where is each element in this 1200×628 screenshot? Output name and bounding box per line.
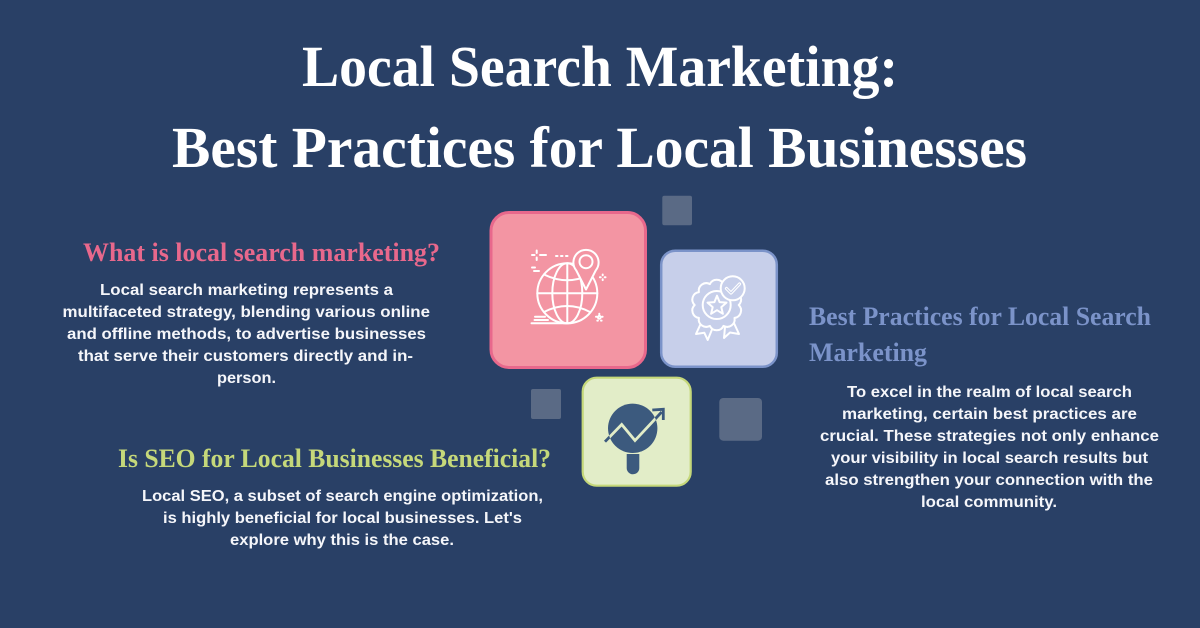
panel: best practices	[809, 302, 1159, 511]
decorative square: top	[662, 196, 692, 225]
panel: is SEO beneficial	[118, 444, 551, 549]
heading: what is local search marketing: What is local search marketing?	[83, 238, 440, 267]
icon: globe with location pin	[532, 250, 606, 323]
text block: local search definition: multifaceted strategy, blending various online	[62, 304, 430, 321]
text block: best practices explanation	[820, 384, 1159, 511]
text block: local search definition: and offline methods, to advertise businesses	[67, 326, 426, 343]
text block: local SEO explanation: is highly beneficial for local businesses. Let's	[163, 510, 522, 527]
text block: local search definition	[62, 282, 430, 387]
text block: best practices explanation: also strengthen your connection with the	[825, 472, 1153, 489]
text block: local search definition: person.	[217, 370, 276, 387]
text block: best practices explanation: crucial. These strategies not only enhance	[820, 428, 1159, 445]
text block: local search definition: Local search marketing represents a	[100, 282, 393, 299]
card: green analytics	[583, 378, 691, 486]
heading: best practices: Best Practices for Local Search	[809, 302, 1152, 331]
text block: best practices explanation: marketing, certain best practices are	[842, 406, 1137, 423]
heading: best practices	[809, 302, 1152, 367]
heading: is SEO beneficial: Is SEO for Local Businesses Beneficial?	[118, 444, 551, 473]
title	[172, 34, 1027, 180]
title: Local Search Marketing:	[302, 34, 898, 99]
card: blue medal	[661, 251, 777, 367]
text block: local search definition: that serve their customers directly and in-	[78, 348, 413, 365]
heading: best practices: Marketing	[809, 338, 927, 367]
icon: award medal with check	[692, 276, 745, 340]
text block: best practices explanation: To excel in the realm of local search	[847, 384, 1132, 401]
decorative square: right	[719, 398, 762, 441]
panel: what is local search marketing	[62, 238, 440, 387]
icon: magnifier with rising arrow	[605, 404, 663, 474]
text block: best practices explanation: local community.	[921, 494, 1057, 511]
card: pink globe	[491, 212, 646, 368]
text block: local SEO explanation: explore why this is the case.	[230, 532, 454, 549]
text block: local SEO explanation	[142, 488, 543, 549]
text block: best practices explanation: your visibility in local search results but	[831, 450, 1149, 467]
text block: local SEO explanation: Local SEO, a subset of search engine optimization,	[142, 488, 543, 505]
title: Best Practices for Local Businesses	[172, 115, 1027, 180]
decorative square: left	[531, 389, 561, 419]
